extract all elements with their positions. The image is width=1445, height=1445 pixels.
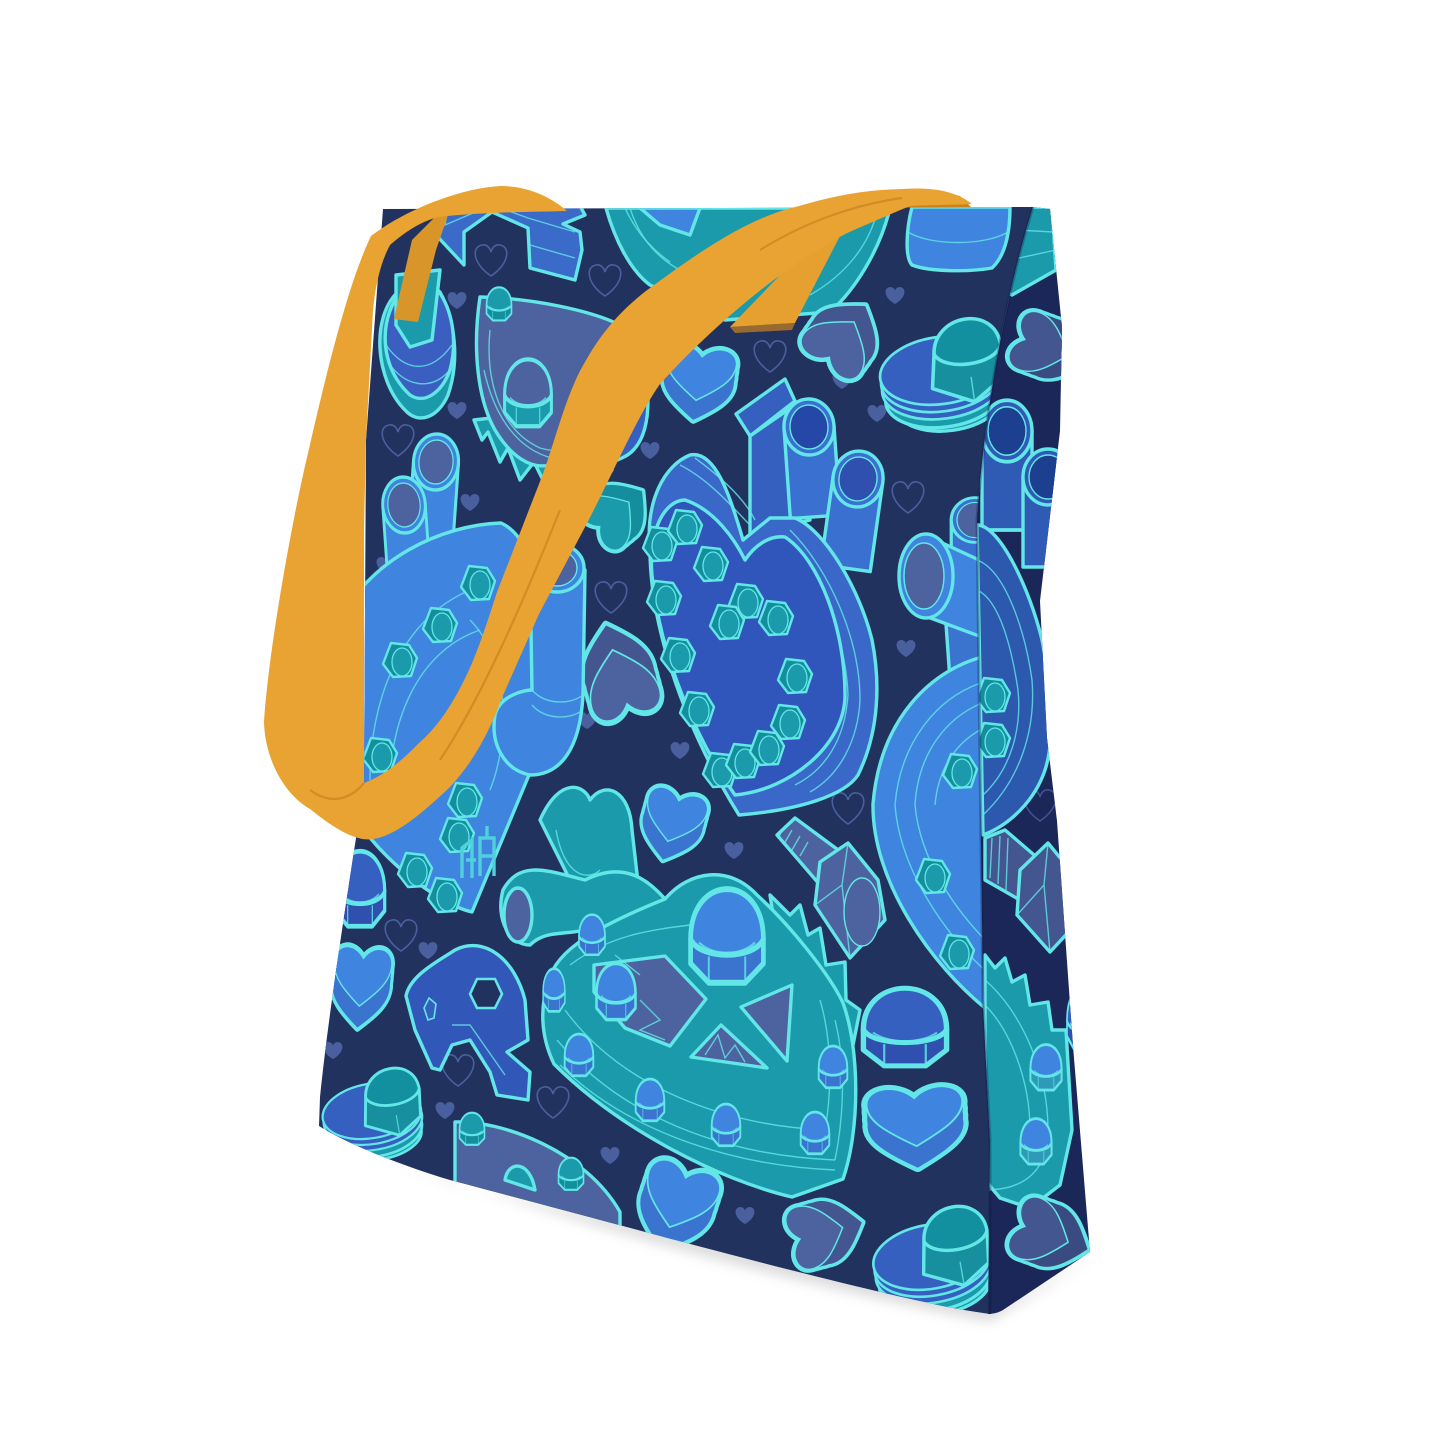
tiny outline hearts [382, 245, 924, 1118]
window B [741, 985, 792, 1061]
stub block [750, 405, 810, 535]
nut: blue bottom [863, 988, 947, 1066]
handle: rear strap behind bag [840, 193, 972, 212]
side teal nut top [1002, 207, 1056, 295]
domed bolts [543, 915, 847, 1154]
pipes [540, 787, 640, 900]
heart: grey top right [797, 302, 880, 384]
window A [594, 956, 706, 1046]
inner face [651, 500, 845, 795]
nut top right [907, 207, 1010, 271]
side fabric [960, 190, 1100, 1330]
gear [472, 416, 614, 482]
left stack with teal nut [380, 270, 455, 418]
bag side panel [960, 190, 1100, 1330]
big heart: left light blue [340, 432, 585, 912]
bolt: grey center [777, 818, 885, 958]
heart outline body [649, 455, 877, 815]
heart: grey bottom [783, 1192, 870, 1272]
heart shape [873, 655, 990, 1012]
side pipes [982, 400, 1073, 567]
side gear heart [985, 955, 1072, 1208]
handle: left strap tab [394, 212, 448, 322]
ground shadow [325, 1130, 1095, 1322]
big heart: teal lower [501, 787, 860, 1197]
big heart: right blue [873, 498, 999, 1012]
stack with nut, top right [878, 316, 1001, 433]
side big heart continuation [976, 525, 1051, 835]
handle: right tab shadow [730, 323, 795, 333]
big heart: center with bolts [643, 379, 887, 815]
small bolt [487, 287, 511, 320]
ring lines [557, 925, 842, 1170]
front pipe [925, 535, 990, 640]
handle: right strap tab [730, 204, 911, 327]
wrench logo: dark blue lower left [406, 946, 530, 1100]
stack bottom left [321, 1066, 424, 1159]
side small nuts on edge [1067, 989, 1093, 1048]
rear pipe [951, 498, 999, 592]
large nut [691, 889, 763, 983]
handle: main strap [330, 188, 972, 839]
gear teeth [770, 895, 860, 1060]
wrench nut top, dark blue [436, 205, 585, 280]
heart: blue center [634, 784, 711, 867]
stem [945, 610, 990, 680]
logo mark [462, 826, 494, 878]
bolts [363, 566, 495, 912]
bolt ring [643, 510, 812, 787]
window C [691, 1025, 767, 1068]
stack bottom right [872, 1204, 989, 1310]
blue back [617, 400, 650, 462]
fold shadow [977, 207, 1033, 1314]
heart: blue bottom right [866, 1085, 966, 1170]
heart: blue under strap [658, 342, 738, 425]
inner rings [680, 458, 860, 792]
heart fragment bottom [455, 1113, 620, 1260]
heart shape [364, 521, 530, 914]
heart: grey center left [584, 620, 664, 726]
elbow pipe [494, 570, 585, 775]
side grey heart [1005, 308, 1098, 391]
pipes [782, 397, 840, 519]
heart: teal small [586, 482, 647, 554]
side grey heart bottom [1005, 1193, 1098, 1279]
nut on half heart [505, 359, 551, 426]
heart: blue bottom [636, 1155, 724, 1244]
nut: blue left [335, 851, 385, 926]
bolts [916, 754, 977, 969]
side tiny hearts [969, 790, 1056, 1081]
tiny background hearts [324, 287, 915, 1224]
pipes [410, 432, 460, 538]
half heart with gear [474, 287, 648, 500]
fabric background [319, 207, 1033, 1314]
handle: left strap [264, 186, 567, 839]
side bolt [985, 830, 1075, 952]
heart: blue left bottom [329, 945, 393, 1030]
body [543, 875, 856, 1197]
handle: strap fold lines [310, 198, 902, 799]
bag front panel [319, 207, 1033, 1314]
grey face [474, 295, 614, 468]
top heart fragment, teal [606, 208, 890, 320]
